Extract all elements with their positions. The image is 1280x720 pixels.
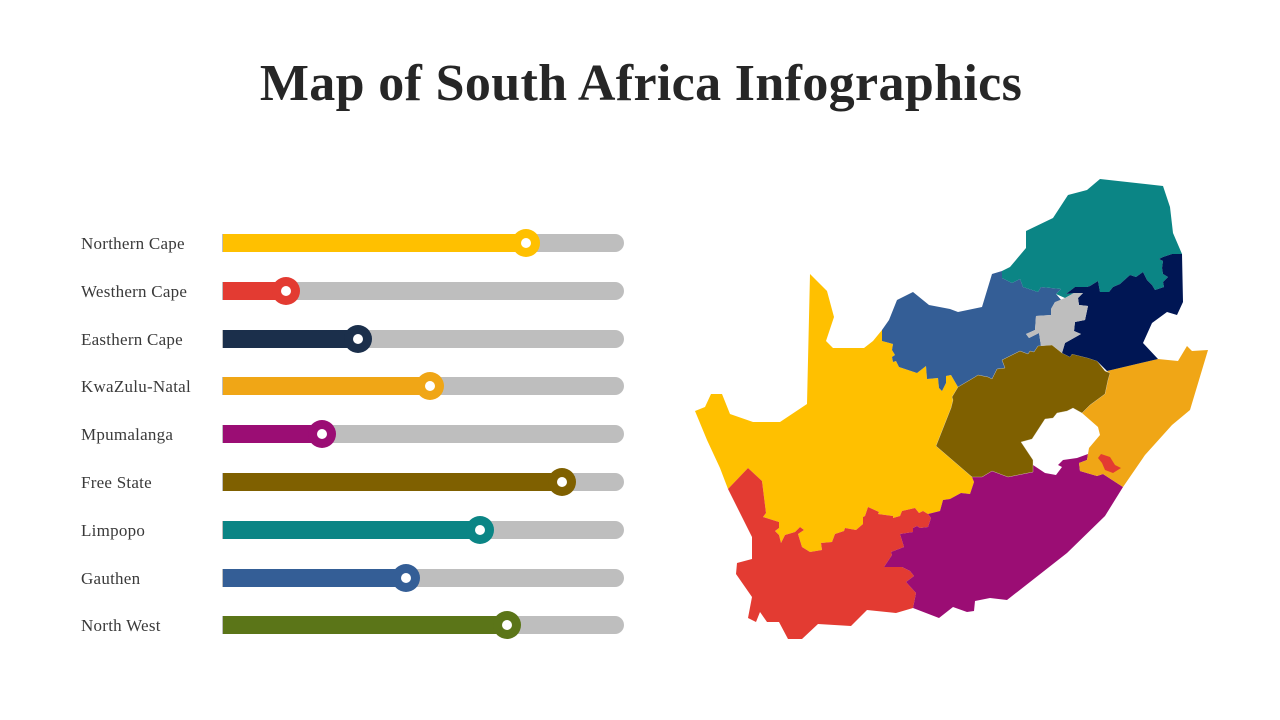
bar row: Northern Cape: Northern Cape bbox=[81, 234, 185, 253]
bar row: Free State bbox=[81, 468, 624, 496]
map region: Gauteng bbox=[1026, 293, 1088, 353]
bar row: Free State: Free State bbox=[81, 473, 152, 492]
bar row: Westhern Cape: Westhern Cape bbox=[81, 282, 187, 301]
bar row: KwaZulu-Natal: KwaZulu-Natal bbox=[81, 377, 191, 396]
bar row: North West: North West bbox=[81, 616, 161, 635]
bar row: North West bbox=[81, 611, 624, 639]
bar row: Northern Cape bbox=[81, 229, 624, 257]
bar row: Limpopo: Limpopo bbox=[81, 521, 145, 540]
map region: KwaZulu-Natal bbox=[1079, 346, 1208, 487]
bar row: KwaZulu-Natal bbox=[81, 372, 624, 400]
bar row: Easthern Cape: Easthern Cape bbox=[81, 330, 183, 349]
map region: Free State bbox=[936, 345, 1110, 477]
bar row: Mpumalanga: Mpumalanga bbox=[81, 425, 173, 444]
map region: Mpumalanga bbox=[1062, 254, 1183, 371]
map region: Northern Cape bbox=[695, 274, 974, 552]
bar row: Gauthen bbox=[81, 564, 624, 592]
map region: North West bbox=[882, 271, 1063, 391]
title: Map of South Africa Infographics bbox=[260, 55, 1022, 112]
bar row: Gauthen: Gauthen bbox=[81, 569, 140, 588]
bar row: Mpumalanga bbox=[81, 420, 624, 448]
map enclave: red spot bbox=[1098, 454, 1121, 473]
bar row: Easthern Cape bbox=[81, 325, 624, 353]
map region: Limpopo bbox=[1002, 179, 1182, 298]
map region: Western Cape bbox=[728, 468, 931, 639]
bar row: Westhern Cape bbox=[81, 277, 624, 305]
map region: Eastern Cape bbox=[884, 454, 1123, 618]
bar row: Limpopo bbox=[81, 516, 624, 544]
